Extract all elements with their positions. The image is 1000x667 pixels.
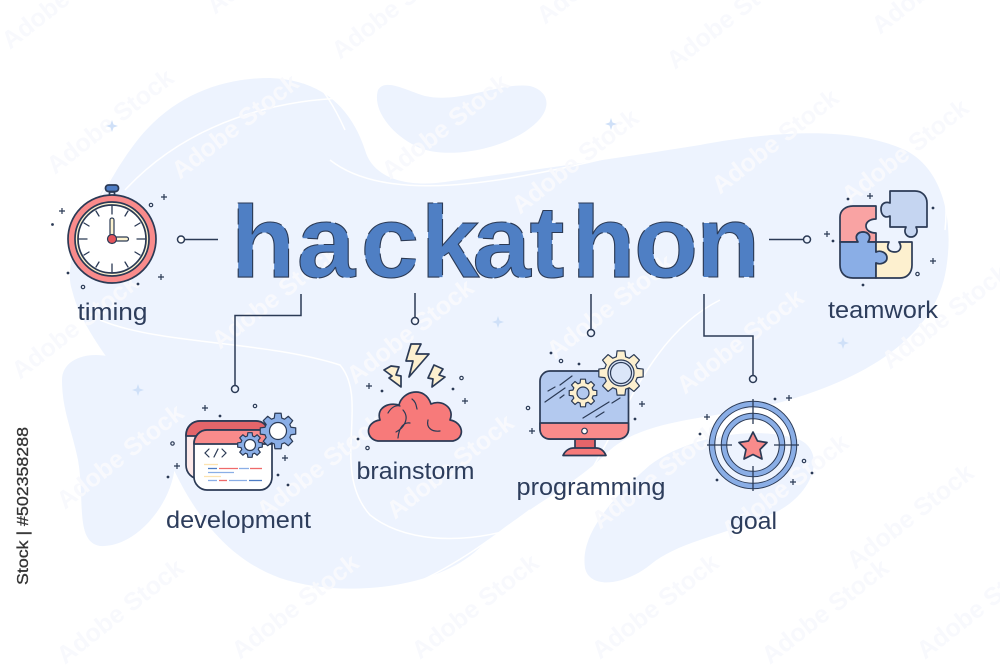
- icon: brain with lightning: [368, 344, 461, 441]
- connector: development: [232, 294, 301, 392]
- watermark: Adobe Stock: [586, 419, 724, 535]
- icon: monitor with gears: [540, 351, 643, 456]
- label: goal: goal: [730, 508, 777, 535]
- watermark: Adobe Stock: [51, 399, 189, 515]
- title: hackathon: [231, 184, 760, 299]
- watermark: Adobe Stock: [716, 429, 854, 545]
- icon: development window: [186, 413, 296, 490]
- label: development: development: [166, 507, 311, 534]
- sparkles: goal: [699, 395, 813, 485]
- icon: target with star: [707, 399, 799, 491]
- label: timing: timing: [78, 299, 148, 326]
- watermark: Adobe Stock: [166, 69, 304, 185]
- label: teamwork: teamwork: [828, 297, 939, 324]
- connector: timing: [178, 236, 218, 243]
- watermark: Adobe Stock: [541, 249, 679, 365]
- label: programming: programming: [516, 474, 666, 501]
- watermark: Adobe Stock: [51, 554, 189, 667]
- watermark: Adobe Stock: [836, 94, 974, 210]
- sparkles: brainstorm: [357, 376, 468, 450]
- watermark: Adobe Stock: [206, 239, 344, 355]
- connector: teamwork: [769, 236, 810, 243]
- watermark: Adobe Stock: [251, 409, 389, 525]
- watermark: Adobe Stock: [756, 554, 894, 667]
- watermark: Adobe Stock: [381, 409, 519, 525]
- connector: programming: [588, 294, 594, 336]
- sparkles: puzzle: [824, 193, 936, 286]
- sparkles: programming: [526, 352, 645, 434]
- watermark: Adobe Stock: [406, 549, 544, 665]
- stock id side text: Stock | #502358288: [15, 427, 32, 585]
- watermark: Adobe Stock: [376, 69, 514, 185]
- watermark: Adobe Stock: [341, 274, 479, 390]
- watermark: Adobe Stock: [841, 459, 979, 575]
- connector: brainstorm: [412, 293, 418, 324]
- connector: goal: [704, 294, 756, 382]
- watermark: Adobe Stock: [706, 84, 844, 200]
- watermark: Adobe Stock: [41, 64, 179, 180]
- background blobs: [62, 78, 949, 589]
- sparkles: stopwatch: [52, 194, 167, 289]
- pale sparkles: [106, 118, 849, 396]
- white contour lines: [95, 55, 946, 604]
- watermark: Adobe Stock: [671, 284, 809, 400]
- icon: puzzle: [840, 191, 927, 278]
- icon: stopwatch: [68, 185, 156, 283]
- watermark: Adobe Stock: [6, 269, 144, 385]
- watermark: Adobe Stock: [226, 549, 364, 665]
- watermark: Adobe Stock: [506, 104, 644, 220]
- label: brainstorm: brainstorm: [356, 458, 474, 485]
- watermark: Adobe Stock: [586, 549, 724, 665]
- sparkles: development: [167, 404, 289, 486]
